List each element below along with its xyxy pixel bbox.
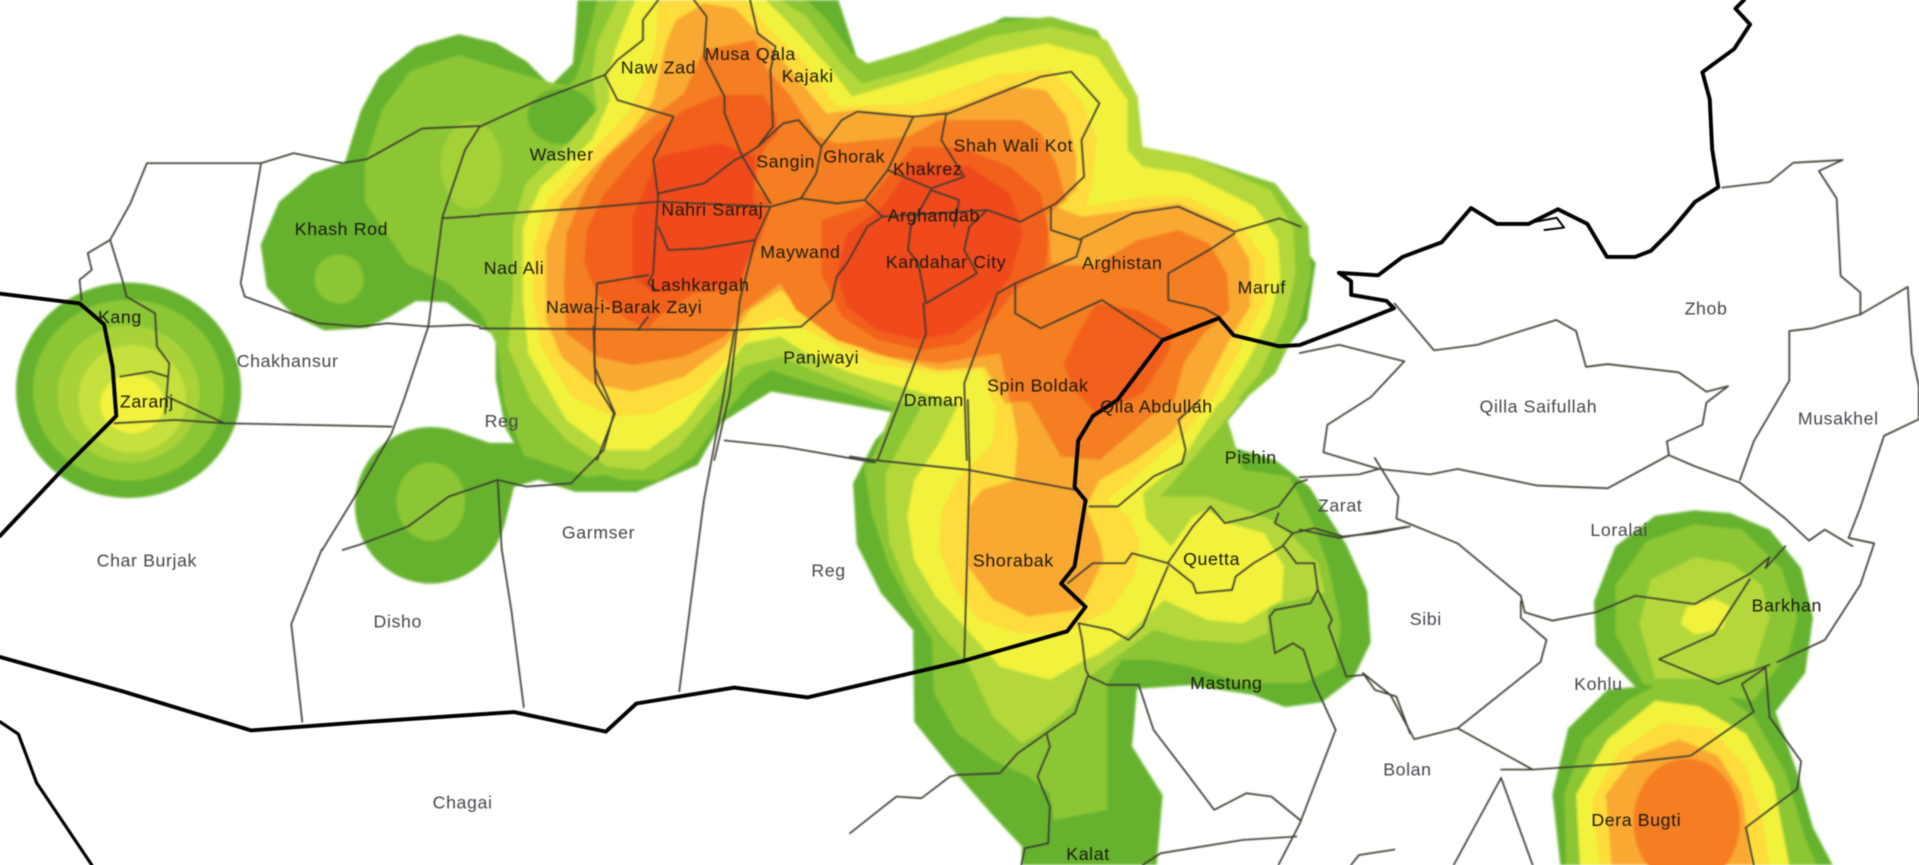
heat level 6: light orange (546, 3, 1752, 865)
district labels on white: Qilla Saifullah (1480, 396, 1597, 416)
district labels on heat: Quetta (1183, 549, 1240, 569)
washer pocket of dark green (527, 88, 596, 144)
central helmand and kandahar boundaries (480, 0, 1301, 460)
district labels on heat: Nad Ali (484, 258, 544, 278)
district labels on heat: Daman (904, 390, 964, 410)
district labels on heat: Kang (98, 307, 142, 327)
east balochistan boundaries (1300, 160, 1919, 865)
district labels on heat: Arghistan (1082, 253, 1162, 273)
district labels on white: Reg (485, 411, 519, 431)
district labels on heat: Nawa-i-Barak Zayi (546, 297, 702, 317)
district labels on heat: Ghorak (823, 147, 885, 167)
district labels on heat: Zaranj (120, 391, 174, 411)
district labels on heat: Sangin (756, 152, 815, 172)
district labels on heat: Mastung (1190, 673, 1262, 693)
district labels on heat: Barkhan (1752, 596, 1822, 616)
heat level 9: deepest red (633, 143, 1023, 340)
district labels on white: Zarat (1318, 495, 1362, 515)
district labels on heat: Lashkargah (651, 275, 749, 295)
district labels on white: Disho (374, 612, 422, 632)
district labels on heat: Arghandab (888, 205, 980, 225)
quetta region boundaries (850, 400, 1410, 865)
district labels on heat: Nahri Sarraj (661, 199, 763, 219)
district labels on heat: Shorabak (973, 550, 1054, 570)
district labels on heat: Kajaki (782, 66, 834, 86)
district labels on heat: Spin Boldak (987, 376, 1089, 396)
heat level 8: red-orange (584, 95, 1173, 413)
district labels on white: Bolan (1383, 760, 1432, 780)
district labels on heat: Khakrez (893, 159, 962, 179)
district labels on heat: Maywand (760, 242, 840, 262)
district labels on white: Reg (811, 560, 846, 580)
district labels on white: Sibi (1410, 609, 1442, 629)
district labels on white: Loralai (1590, 520, 1648, 540)
district labels on heat: Kandahar City (886, 252, 1006, 272)
district labels on white: Zhob (1685, 298, 1727, 318)
heat level 7: orange (564, 40, 1740, 865)
heat level 5: gold (533, 0, 1770, 865)
heat level 3: light green (58, 0, 1770, 743)
district labels on heat: Shah Wali Kot (954, 136, 1073, 156)
district labels on heat: Khash Rod (295, 219, 388, 239)
district labels on heat: Naw Zad (621, 57, 696, 77)
district labels on white: Chakhansur (237, 351, 338, 371)
district labels on white: Kohlu (1574, 674, 1623, 694)
district labels on heat: Washer (530, 144, 594, 164)
west boundaries (80, 127, 614, 550)
district labels on white: Chagai (433, 793, 493, 813)
district labels on white: Char Burjak (97, 550, 197, 570)
district labels on heat: Dera Bugti (1591, 810, 1681, 830)
district labels on heat: Pishin (1225, 448, 1277, 468)
district labels on heat: Qila Abdullah (1100, 396, 1213, 416)
district labels on white: Garmser (562, 522, 635, 542)
district labels on white (97, 298, 1879, 813)
district labels on heat: Musa Qala (705, 44, 796, 64)
district labels on white: Musakhel (1798, 409, 1879, 429)
southwest boundaries (345, 126, 480, 163)
district labels on heat: Maruf (1238, 278, 1286, 298)
district labels on heat: Kalat (1066, 844, 1110, 864)
district labels on heat: Panjwayi (783, 347, 859, 367)
